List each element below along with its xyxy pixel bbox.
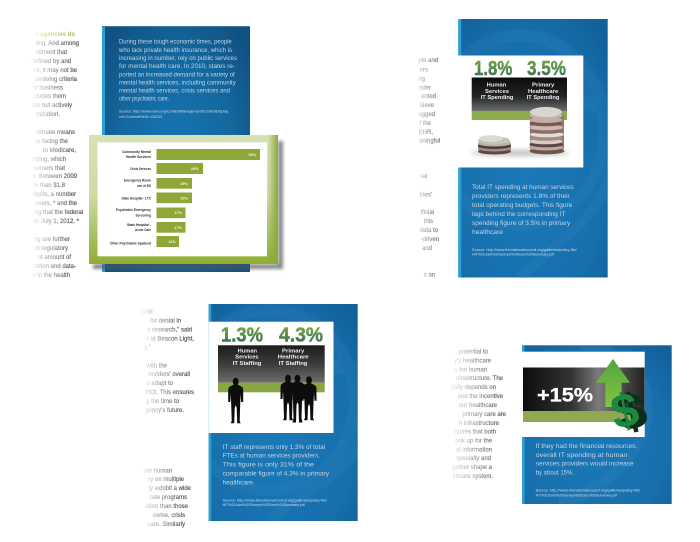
body text column, bottom right: nfrastructure. The — [456, 376, 504, 382]
body text column, bottom left: roviders' overall — [148, 372, 190, 378]
bar: state hospital acute care: Acute Care — [135, 228, 151, 232]
panel text: economic times: increasing in number, rely on public services — [119, 55, 238, 62]
bar: other psychiatric inpatient: 14% — [168, 240, 176, 244]
body text column, bottom left: r at Beacon Light, — [147, 336, 194, 342]
bar: community mental health services — [122, 149, 260, 160]
label: primary healthcare IT spending: IT Spending — [527, 95, 560, 101]
panel text: IT staff: IT staff represents only 1.3% of total — [223, 444, 326, 451]
body text column, bottom left: gency's future. — [145, 408, 184, 414]
body text column, top left: ng are further — [34, 237, 70, 243]
label: primary healthcare IT spending: Healthcare — [528, 89, 558, 95]
body text column, top right: s an — [424, 272, 435, 278]
body text column, top right: ented — [421, 94, 436, 100]
body text column, top right: f the — [419, 121, 432, 127]
body text column, bottom left: d adapt to — [146, 381, 174, 387]
body text column, bottom right: specialty and — [456, 456, 491, 462]
body text column, top right: ple and — [418, 58, 438, 64]
body text column, top left: or business — [32, 86, 63, 92]
body text column, bottom right: ook up for the — [455, 438, 493, 444]
bar: emergency room: use of ED — [137, 184, 151, 188]
icon: tall coin stack — [529, 107, 564, 154]
body text column, bottom right: primary care are — [462, 412, 507, 418]
panel: IT staffing — [208, 304, 358, 521]
panel text: total IT spending: lags behind the corresponding IT — [472, 211, 565, 218]
panel text: economic times: who lack private health insurance, which is — [118, 47, 233, 54]
panel source: HIT%20Joint%20Survey%20Exec%20Summary.pdf — [472, 252, 554, 256]
body text column, bottom left: rate programs — [150, 495, 187, 501]
panel source: HIT%20Joint%20Survey%20Exec%20Summary.pdf — [223, 503, 305, 507]
body text column, top left: to Medicare, — [43, 148, 76, 154]
panel source — [119, 110, 229, 119]
panel text: economic times: ported an increased demand for a variety of — [119, 72, 235, 79]
body text column, top left: nt regulatory — [35, 246, 68, 252]
label: primary healthcare IT staffing: Healthcare — [278, 355, 309, 361]
body text column, top left: defined by and — [32, 59, 71, 65]
icon: 3D dollar sign: $ — [614, 384, 651, 441]
body text column, top right: EHR, — [419, 130, 433, 136]
bar: crisis services: Crisis Services — [130, 167, 151, 171]
body text column, top left: s. Between 2009 — [32, 174, 78, 180]
label: primary healthcare IT spending: Primary — [532, 83, 555, 89]
panel text: economic times: for mental health care. In 2010, states re- — [119, 63, 235, 70]
panel text: total IT spending: total operating budgets. This figure — [472, 202, 573, 209]
body text column, top left: dgets, a number — [33, 192, 76, 198]
icon: 3D dollar sign: $ — [606, 383, 644, 440]
bar: state hospital LTC: 19% — [180, 196, 188, 200]
photo panel: growth arrow — [522, 352, 651, 441]
panel source — [223, 498, 327, 507]
body text column, top left: evolving criteria — [35, 77, 78, 83]
panel source — [472, 248, 577, 256]
bar: state hospital LTC: State Hospital - LTC — [122, 196, 151, 200]
panel text: financial resources: overall IT spending at human — [536, 452, 628, 459]
panel source: Source: http://www.thenationalcouncil.org/galleries/policy-file/ — [472, 248, 577, 252]
body text column, top right: ng — [418, 76, 425, 82]
body text column, top left: is facing the — [36, 139, 69, 145]
stat: 1.8%: 1.8% — [474, 57, 512, 80]
body text column, top right: aningful — [419, 138, 440, 144]
body text column, top left: years, * and the — [35, 201, 78, 207]
stat: 4.3%: 4.3% — [279, 324, 323, 347]
bar: state hospital acute care: 17% — [174, 226, 183, 230]
panel text: total IT spending — [472, 184, 574, 236]
body text column, bottom right — [451, 350, 507, 480]
bar: state hospital LTC — [122, 192, 192, 203]
panel text: economic times — [118, 39, 238, 103]
panel text: financial resources: If they had the financial resources, — [536, 443, 637, 450]
icon: small coin stack — [478, 135, 511, 154]
stat: 1.3%: 1.3% — [221, 324, 263, 347]
body text column, bottom right: potential to — [459, 350, 489, 356]
body text column, bottom left: o research," said — [147, 328, 192, 334]
body text column, bottom left: ry on multiple — [148, 477, 185, 483]
bar: other psychiatric inpatient: Other Psychiatric Inpatient — [110, 241, 152, 245]
body text column, top right: fficial — [420, 210, 434, 216]
icon: green up arrow — [596, 359, 630, 407]
label: human services IT staffing: Services — [235, 355, 259, 361]
label: primary healthcare IT staffing — [278, 348, 309, 367]
body text column, bottom left: care. Similarly — [147, 522, 185, 528]
panel text: economic times: During these tough economic times, people — [119, 39, 232, 46]
panel text: economic times: other psychiatric care. — [119, 96, 169, 103]
body text column, top right: nder — [419, 86, 431, 92]
body text column, bottom left: g the time to — [146, 399, 180, 405]
photo panel: staff silhouettes — [209, 322, 334, 433]
label: primary healthcare IT staffing: IT Staffing — [279, 361, 308, 367]
body text column, top right — [418, 58, 440, 278]
icon: group of silhouettes — [280, 375, 316, 422]
label: primary healthcare IT staffing: Primary — [282, 348, 305, 354]
body text column, bottom left: EHR — [140, 310, 154, 316]
icon: coin shadow — [470, 150, 570, 156]
bar: community mental health services: 50% — [248, 153, 257, 157]
body text column, bottom right: lthcare system. — [453, 474, 493, 480]
body text column, bottom right: and the incentive — [458, 394, 504, 400]
panel: +15% IT spending — [522, 345, 672, 504]
body text column, top left: sumers that — [34, 166, 65, 172]
body text column, top right: ral — [420, 174, 427, 180]
bar: other psychiatric inpatient — [110, 236, 179, 247]
chart frame shadow — [93, 141, 283, 269]
label: primary healthcare IT spending — [527, 83, 560, 101]
panel text: total IT spending: healthcare — [472, 229, 503, 236]
body text column, top right: -driven — [421, 237, 439, 243]
panel text: IT staff: FTEs at human services providers. — [223, 453, 320, 460]
body text column, bottom right: h infrastructure — [459, 421, 500, 427]
bar: psychiatric emergency screening: Psychiatric Emergency — [116, 208, 151, 212]
body text column, top right: ers — [420, 68, 428, 74]
panel text: IT staff: This figure is only 31% of the — [223, 462, 314, 469]
body text column, bottom right: y's healthcare — [454, 358, 492, 364]
icon: single silhouette — [228, 378, 243, 423]
body text column, bottom left — [140, 310, 194, 528]
body text column, bottom left: ewise, crisis — [153, 513, 185, 519]
body text column, top right: tries' — [420, 192, 432, 198]
bar: crisis services: 24% — [191, 167, 199, 171]
body text column, top right: ogged — [418, 112, 435, 118]
bar: state hospital acute care: State Hospital - — [127, 223, 152, 227]
panel text: financial resources — [536, 443, 637, 477]
panel: IT spending — [458, 19, 608, 278]
body text column, top left: ting. And among — [36, 41, 79, 47]
body text column, bottom right: our healthcare — [459, 403, 498, 409]
body text column, bottom left: ROI. This ensures — [146, 390, 194, 396]
photo panel: coins — [458, 56, 583, 168]
panel text: total IT spending: providers represents 1.8% of their — [472, 193, 570, 200]
body text column, bottom left: s." — [144, 346, 151, 352]
body text column, top left: re than $1.8 — [33, 183, 66, 189]
bar: psychiatric emergency screening: 17% — [174, 211, 183, 215]
bar chart panel — [89, 135, 278, 264]
body text column, bottom right: gether shape a — [452, 465, 493, 471]
body text column, top left: on July 1, 2012. * — [33, 219, 80, 225]
body text column, top left: nding, which — [33, 157, 66, 163]
bar: community mental health services: Community Mental — [122, 150, 151, 154]
body text column, top left: nt amount of — [38, 255, 71, 261]
panel text: economic times: mental health services, crisis services and — [119, 88, 230, 95]
panel text: financial resources: by about 15%. — [536, 470, 574, 477]
stat: 3.5%: 3.5% — [527, 57, 566, 80]
bar: emergency room: 19% — [180, 182, 188, 186]
panel: public mental health services text — [102, 26, 250, 272]
panel text: economic times: mental health services, including community — [119, 80, 236, 87]
panel text: IT staff: comparable figure of 4.3% in primary — [223, 471, 330, 478]
label: human services IT staffing — [233, 348, 262, 367]
body text column, bottom left: ate human — [144, 468, 172, 474]
body text column, top right: and — [422, 246, 432, 252]
bar: emergency room — [124, 178, 192, 189]
body text column, top right: this — [424, 219, 433, 225]
body text column, top right: hieve — [420, 103, 435, 109]
body text column, bottom right: quires that both — [455, 430, 496, 436]
bar: psychiatric emergency screening: Screening — [136, 213, 151, 217]
body text column, top left: s in the health — [33, 273, 70, 279]
panel source — [536, 488, 640, 497]
panel text: total IT spending: Total IT spending at human services — [472, 184, 574, 191]
bar: state hospital acute care — [127, 222, 186, 233]
body text column, top left: ration and data- — [34, 264, 76, 270]
body text column, top left: s agencies do — [35, 32, 75, 38]
label: human services IT staffing: IT Staffing — [233, 361, 262, 367]
body text column, bottom left: for denial in — [150, 318, 181, 324]
panel text: IT staff — [223, 444, 330, 487]
label: human services IT spending: Services — [485, 89, 509, 95]
dark band — [472, 78, 567, 120]
panel source: HIT%20Joint%20Survey%20Exec%20Summary.pdf — [536, 493, 617, 497]
body text column, top left: ntiment that — [36, 50, 67, 56]
bar: psychiatric emergency screening — [116, 208, 186, 218]
dark band — [218, 345, 325, 392]
label: human services IT staffing: Human — [238, 348, 258, 354]
label: human services IT spending — [481, 83, 514, 101]
body text column, top left: rnization. — [36, 112, 60, 118]
body text column, bottom right: tially depends on — [451, 385, 496, 391]
body text column, top left: re, it may not be — [34, 68, 78, 74]
body text column, top left: climate means — [36, 130, 75, 136]
body text column, top left: ng that the federal — [35, 210, 83, 216]
body text column, bottom left: ation than those — [145, 504, 189, 510]
label: human services IT spending: IT Spending — [481, 95, 514, 101]
body text column, top left: ion but actively — [32, 103, 72, 109]
panel source: Source: http://www.nami.org/ContentManagement/ContentDisplay. — [119, 110, 229, 114]
panel text: financial resources: services providers would increase — [536, 461, 634, 468]
body text column, bottom right: n the human — [454, 368, 487, 374]
label: human services IT spending: Human — [487, 83, 507, 89]
panel source: cfm?ContentFileID=126233 — [119, 115, 162, 119]
body text column, top right: data to — [420, 228, 439, 234]
body text column, top left: cludes them — [34, 94, 66, 100]
body text column, top left — [32, 32, 83, 279]
bar: community mental health services: Health Services — [126, 155, 151, 159]
bar: emergency room: Emergency Room — [124, 178, 151, 182]
body text column, bottom left: with the — [145, 364, 168, 370]
panel source: Source: http://www.thenationalcouncil.org/galleries/policy-file/ — [536, 488, 640, 492]
panel text: total IT spending: spending figure of 3.5% in primary — [472, 220, 571, 227]
panel text: IT staff: healthcare. — [223, 480, 255, 487]
panel source: Source: http://www.thenationalcouncil.org/galleries/policy-file/ — [223, 498, 327, 502]
bar: crisis services — [130, 163, 203, 174]
dark band — [523, 368, 644, 422]
stat: +15%: +15% — [537, 384, 593, 406]
body text column, bottom right: al information — [456, 448, 492, 454]
body text column, bottom left: ly exhibit a wide — [149, 486, 192, 492]
